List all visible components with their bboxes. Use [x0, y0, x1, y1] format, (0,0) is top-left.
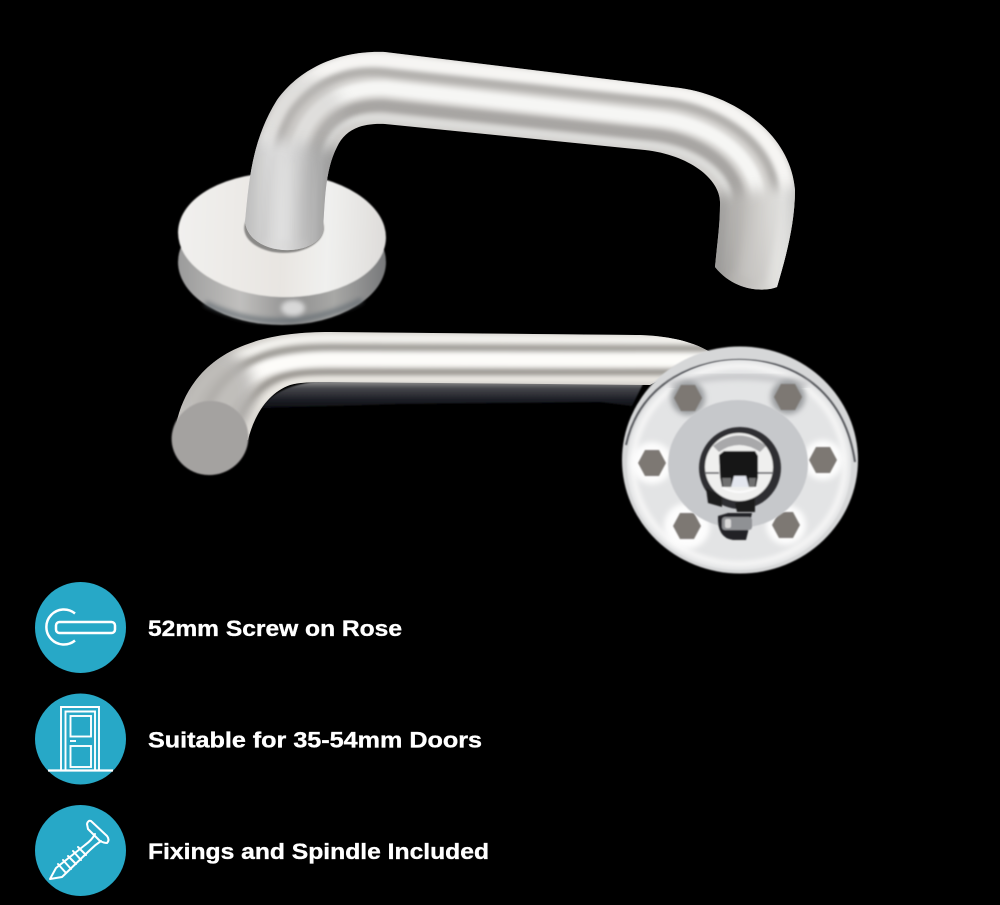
- icon: door handle: [35, 582, 126, 673]
- icon: screw: [35, 805, 126, 896]
- lower handle end cap: [163, 392, 257, 484]
- feature: 52mm screw on rose: [35, 582, 402, 673]
- top door handle on rose: [176, 40, 810, 325]
- spindle retaining pin: [718, 513, 752, 540]
- socket white ring: [705, 433, 773, 501]
- rose face: [627, 360, 851, 570]
- top handle lever: [245, 52, 795, 290]
- lower handle dark reflection: [262, 380, 645, 408]
- feature: suitable door thickness: [35, 694, 482, 784]
- hex screw holes: [631, 380, 843, 549]
- socket dark ring: [699, 427, 781, 509]
- spindle socket: [699, 427, 781, 512]
- feature: fixings and spindle: [35, 805, 489, 896]
- icon: door: [35, 694, 126, 784]
- back plate of lower rose: [622, 346, 858, 574]
- lower handle lever: [176, 332, 709, 440]
- label: Fixings and Spindle Included: [148, 839, 489, 864]
- rose outer rim: [622, 346, 858, 574]
- square spindle hole: [719, 451, 758, 487]
- label: Suitable for 35-54mm Doors: [148, 728, 482, 752]
- centre disc: [668, 400, 808, 528]
- label: 52mm Screw on Rose: [148, 616, 402, 641]
- top handle rose: [176, 169, 388, 325]
- lower door handle: [170, 332, 709, 476]
